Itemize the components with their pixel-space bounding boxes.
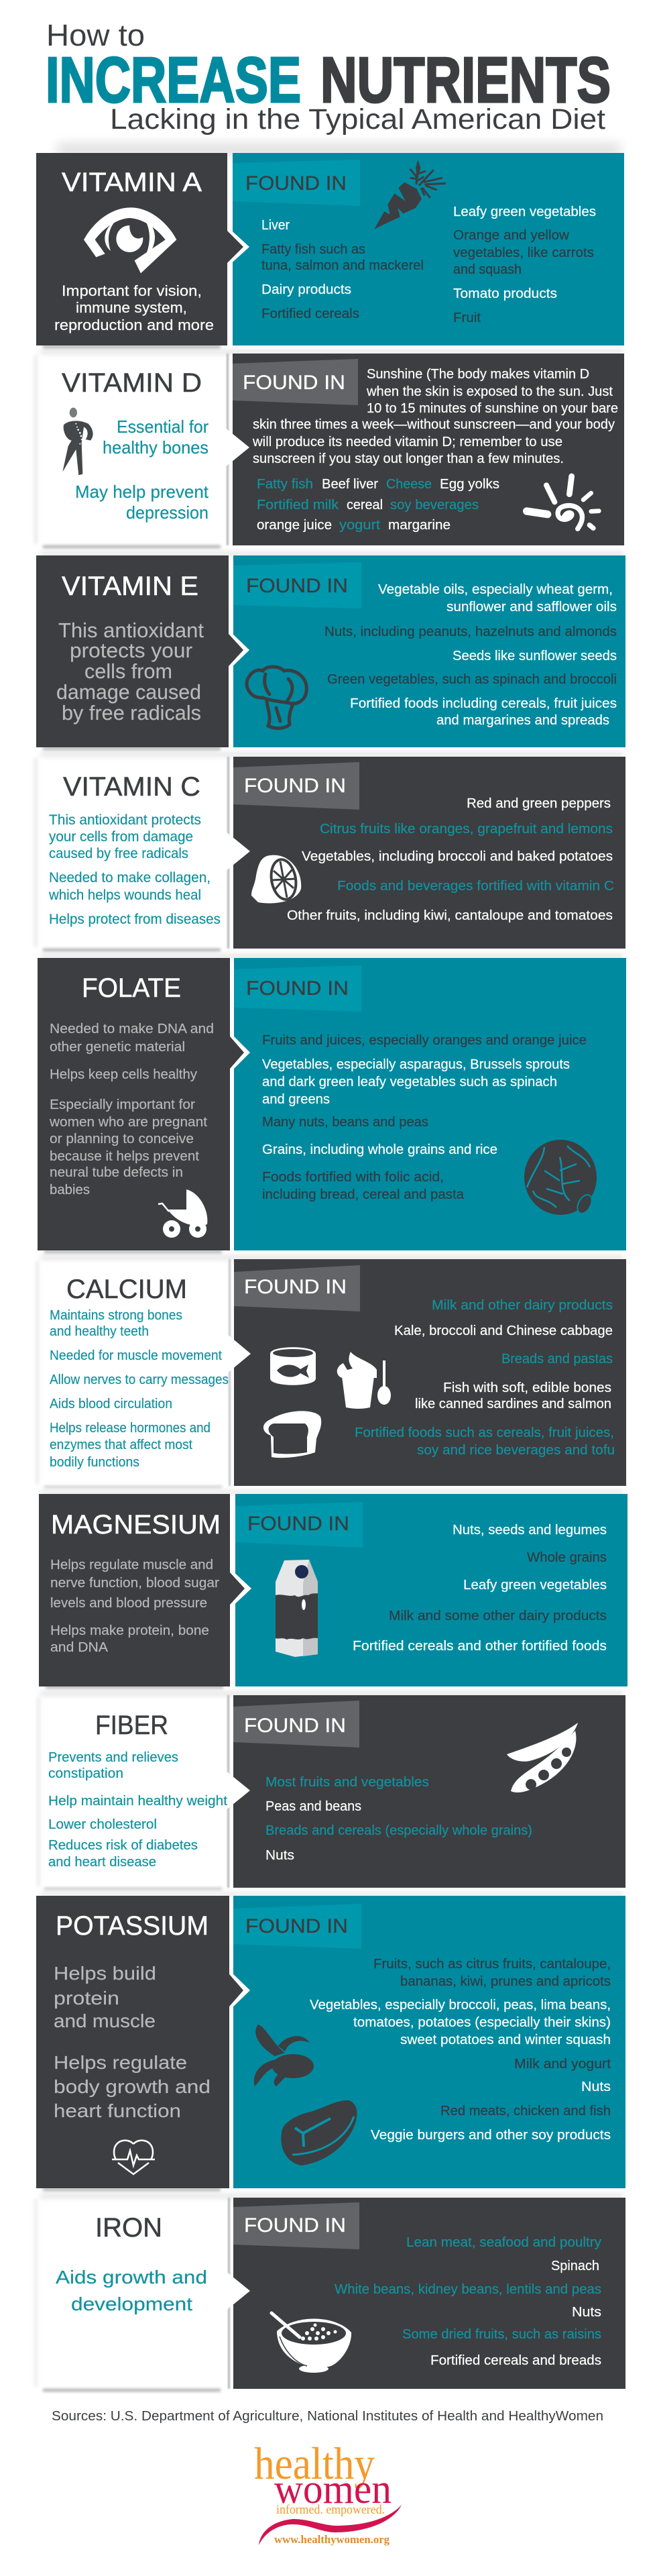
panel: calcium: like canned sardines and salmon [415,1397,611,1411]
icon: banana [254,2025,314,2086]
panel: vitamin E: Fortified foods including cereals, fruit juices [350,696,617,711]
panel: folate: FOUND IN [246,977,349,1000]
panel: vitamin A: Fortified cereals [261,307,359,321]
panel: folate: women who are pregnant [49,1115,207,1130]
panel: iron: Aids growth and [56,2267,207,2288]
panel: vitamin D: FOUND IN [243,372,345,394]
panel: vitamin D: orange juice [257,518,332,533]
panel: calcium: Needed for muscle movement [50,1348,222,1363]
panel: vitamin E: cells from [84,659,172,683]
panel: vitamin A: and squash [453,262,522,277]
icon: steak [281,2100,357,2165]
panel: potassium: Red meats, chicken and fish [440,2104,611,2118]
panel: vitamin A: tuna, salmon and mackerel [261,258,424,273]
panel: fiber: and heart disease [48,1855,156,1870]
panel: vitamin D: Fortified milk [257,498,339,513]
title [46,18,611,136]
panel: iron: White beans, kidney beans, lentils and peas [335,2282,601,2297]
panel: calcium: Helps release hormones and [50,1421,211,1436]
panel: vitamin C: Needed to make collagen, [49,870,211,885]
panel: folate: babies [50,1183,90,1197]
logo: healthy women: women [274,2467,392,2512]
panel: fiber: FOUND IN [244,1715,346,1737]
panel: vitamin D [35,354,624,545]
panel: magnesium: and DNA [50,1640,109,1655]
panel: vitamin D: 10 to 15 minutes of sunshine on your bare [367,401,618,416]
panel: calcium: soy and rice beverages and tofu [417,1443,615,1458]
panel: vitamin E [36,555,625,747]
panel: vitamin D: skin three times a week—without sunscreen—and your body [253,417,615,432]
panel: folate [38,958,626,1250]
panel: vitamin A: Fatty fish such as [261,242,365,257]
panel: folate: because it helps prevent [50,1149,199,1164]
panel: magnesium [39,1494,628,1686]
icon: stroller [158,1189,207,1238]
panel: magnesium: levels and blood pressure [50,1596,207,1611]
panel: magnesium: Nuts, seeds and legumes [453,1523,607,1538]
panel: vitamin A: VITAMIN A [62,168,202,197]
panel: vitamin E: by free radicals [62,701,201,724]
panel: magnesium: Whole grains [527,1550,607,1565]
panel: folate: neural tube defects in [50,1165,183,1180]
panel: vitamin C: Vegetables, including broccoli and baked potatoes [302,849,613,864]
panel: calcium: Fish with soft, edible bones [443,1381,611,1395]
icon: bread [263,1411,321,1458]
panel: vitamin C: FOUND IN [244,775,346,797]
logo: healthy women [254,2438,402,2546]
panel: folate: Vegetables, especially asparagus, Brussels sprouts [262,1057,570,1072]
panel: iron: FOUND IN [244,2214,346,2237]
panel: magnesium: FOUND IN [247,1513,349,1535]
panel: fiber: Help maintain healthy weight [48,1794,227,1809]
panel: calcium: Aids blood circulation [50,1397,172,1411]
panel: fiber: Most fruits and vegetables [265,1775,429,1790]
panel: folate: FOLATE [82,973,181,1003]
panel: calcium [36,1259,626,1486]
panel: potassium: FOUND IN [245,1915,348,1937]
panel: vitamin C: This antioxidant protects [49,812,201,828]
panel: vitamin C [35,757,625,949]
panel: vitamin D: margarine [388,518,451,533]
logo: healthy women: healthy [254,2438,375,2489]
panel: iron: IRON [95,2213,162,2243]
panel: fiber: Reduces risk of diabetes [48,1838,198,1853]
panel: folate: and greens [262,1092,330,1107]
panel: folate: and dark green leafy vegetables such as spinach [262,1075,557,1089]
panel: potassium: heart function [54,2100,181,2121]
panel: vitamin D: Cheese [386,477,432,492]
panel: fiber: Peas and beans [265,1799,361,1814]
panel: fiber: constipation [48,1766,123,1781]
panel: vitamin E: Green vegetables, such as spinach and broccoli [327,672,617,687]
icon: yogurt and spoon [337,1352,391,1409]
panel: fiber: Prevents and relieves [48,1750,178,1765]
panel: vitamin D: when the skin is exposed to the sun. Just [366,384,613,399]
icon: milk carton [276,1560,318,1657]
panel: vitamin A: Fruit [453,311,481,325]
panel: vitamin D: Fatty fish [257,477,313,492]
panel: potassium: Vegetables, especially broccoli, peas, lima beans, [310,1998,611,2012]
panel: calcium: Kale, broccoli and Chinese cabbage [394,1324,613,1338]
panel: iron: Nuts [572,2305,601,2320]
icon: spine figure [62,408,93,475]
panel: fiber: Lower cholesterol [48,1817,157,1832]
panel: folate: Needed to make DNA and [50,1022,214,1036]
panel: fiber: FIBER [95,1711,168,1740]
panel: potassium: protein [54,1988,119,2008]
panel: vitamin C: Other fruits, including kiwi, cantaloupe and tomatoes [287,908,613,923]
panel: vitamin D: depression [126,502,208,523]
panel: vitamin A: Liver [261,218,290,233]
panel: calcium: Milk and other dairy products [432,1298,613,1313]
panel: vitamin D: yogurt [339,518,380,533]
sources: Sources: U.S. Department of Agriculture, National Institutes of Health and HealthyWomen [52,2409,603,2424]
panel: vitamin D: sunscreen if you stay out longer than a few minutes. [253,451,564,466]
panel: magnesium: nerve function, blood sugar [50,1576,219,1591]
panel: potassium: Helps regulate [54,2052,187,2073]
panel: magnesium: Helps make protein, bone [50,1623,209,1638]
panel: fiber: Nuts [265,1848,294,1863]
panel: folate: Helps keep cells healthy [50,1067,197,1082]
panel: folate: Fruits and juices, especially oranges and orange juice [262,1033,587,1048]
panel: magnesium: MAGNESIUM [51,1510,221,1540]
panel: calcium: bodily functions [50,1455,139,1470]
panel: magnesium: Leafy green vegetables [463,1578,607,1593]
panel: vitamin E: Nuts, including peanuts, hazelnuts and almonds [324,625,617,639]
logo: healthy women: www.healthywomen.org [274,2533,390,2546]
panel: calcium: Fortified foods such as cereals, fruit juices, [355,1426,614,1440]
panel: vitamin C: Citrus fruits like oranges, grapefruit and lemons [320,822,613,837]
title: Lacking in the Typical American Diet [110,103,605,136]
panel: vitamin A: FOUND IN [245,172,347,195]
icon: canned fish [270,1347,316,1385]
panel: vitamin E: sunflower and safflower oils [446,600,617,614]
panel: iron: development [71,2294,192,2314]
panel: vitamin A: Orange and yellow [453,228,570,243]
panel: calcium: Allow nerves to carry messages [50,1373,229,1387]
panel: potassium: bananas, kiwi, prunes and apricots [400,1974,611,1989]
panel: vitamin D: cereal [347,498,383,513]
panel: potassium: and muscle [54,2010,156,2031]
panel: calcium: Maintains strong bones [50,1308,182,1323]
panel: folate: Especially important for [50,1097,195,1112]
panel: vitamin C: Red and green peppers [467,796,611,811]
panel: potassium: body growth and [54,2076,211,2097]
panel: vitamin A: Important for vision, [62,282,202,299]
panel: potassium: POTASSIUM [56,1911,208,1941]
icon: pea pod [507,1723,578,1792]
panel: potassium: Fruits, such as citrus fruits, cantaloupe, [373,1957,611,1972]
panel: iron: Some dried fruits, such as raisins [402,2327,601,2342]
panel: potassium: sweet potatoes and winter squash [400,2033,611,2047]
panel: vitamin A: reproduction and more [54,317,214,333]
panel: vitamin E: and margarines and spreads [436,713,609,728]
panel: vitamin E: Seeds like sunflower seeds [453,649,617,663]
panel: fiber [38,1695,625,1888]
panel: folate: Grains, including whole grains and rice [262,1142,497,1157]
panel: potassium: Veggie burgers and other soy products [371,2128,611,2143]
panel: vitamin E: VITAMIN E [62,572,198,601]
panel: fiber: Breads and cereals (especially whole grains) [265,1823,532,1838]
panel: vitamin D: soy beverages [390,498,479,513]
icon: heart with pulse [112,2141,155,2174]
panel: potassium: Helps build [54,1963,156,1984]
panel: magnesium: Helps regulate muscle and [50,1558,213,1572]
panel: vitamin D: healthy bones [103,437,208,458]
panel: folate: Many nuts, beans and peas [262,1115,428,1130]
panel: vitamin A: vegetables, like carrots [453,246,594,260]
icon: leafy greens [524,1140,597,1216]
panel: magnesium: Fortified cereals and other fortified foods [353,1639,607,1654]
panel: vitamin A [36,153,624,345]
panel: folate: other genetic material [50,1040,185,1055]
panel: vitamin C: Helps protect from diseases [49,912,221,927]
icon: cereal bowl [272,2313,351,2373]
title: How to [46,18,145,52]
panel: calcium: Breads and pastas [501,1352,613,1366]
panel: vitamin C: caused by free radicals [49,846,188,861]
panel: vitamin C: your cells from damage [49,829,193,845]
panel: iron: Lean meat, seafood and poultry [406,2235,601,2250]
panel: vitamin D: Sunshine (The body makes vitamin D [367,367,589,382]
icon: broccoli [247,667,306,729]
panel: folate: Foods fortified with folic acid, [262,1170,444,1185]
panel: iron: Fortified cereals and breads [430,2353,601,2368]
title: INCREASE [46,44,301,116]
panel: vitamin A: Dairy products [261,282,351,297]
panel: folate: including bread, cereal and pasta [262,1187,465,1202]
icon: lemon [251,855,301,904]
panel: vitamin D: Essential for [117,417,208,437]
icon: eye [84,207,176,273]
panel: vitamin E: damage caused [56,680,201,704]
panel: iron: Spinach [551,2259,599,2273]
panel: vitamin C: Foods and beverages fortified with vitamin C [337,879,614,894]
panel: vitamin D: May help prevent [75,482,209,502]
panel: vitamin D: Egg yolks [440,477,499,492]
panel: vitamin C: VITAMIN C [63,772,200,802]
panel: vitamin E: FOUND IN [246,575,348,597]
panel: vitamin D: Beef liver [322,477,378,492]
panel: potassium: Nuts [581,2080,611,2094]
panel: folate: or planning to conceive [50,1132,194,1146]
panel: vitamin C: which helps wounds heal [48,888,201,903]
panel: calcium: CALCIUM [66,1275,187,1304]
panel: calcium: enzymes that affect most [50,1438,192,1452]
icon: sun [527,476,599,529]
panel: vitamin A: Leafy green vegetables [453,205,596,219]
panel: vitamin A: Tomato products [453,286,557,301]
panel: vitamin E: protects your [70,639,192,662]
panel: magnesium: Milk and some other dairy products [389,1609,607,1623]
panel: potassium: Milk and yogurt [514,2057,611,2072]
panel: vitamin D: will produce its needed vitamin D; remember to use [252,435,562,449]
icon: carrot [374,160,446,229]
panel: potassium [36,1896,625,2188]
panel: vitamin E: Vegetable oils, especially wheat germ, [378,582,613,597]
panel: calcium: and healthy teeth [50,1324,149,1339]
panel: potassium: tomatoes, potatoes (especially their skins) [353,2015,611,2030]
panel: vitamin D: VITAMIN D [62,368,202,398]
panel: iron [35,2198,625,2389]
logo: healthy women: informed. empowered. [276,2503,385,2517]
panel: vitamin A: immune system, [76,299,187,316]
panel: vitamin E: This antioxidant [58,619,204,642]
panel: calcium: FOUND IN [244,1276,347,1298]
